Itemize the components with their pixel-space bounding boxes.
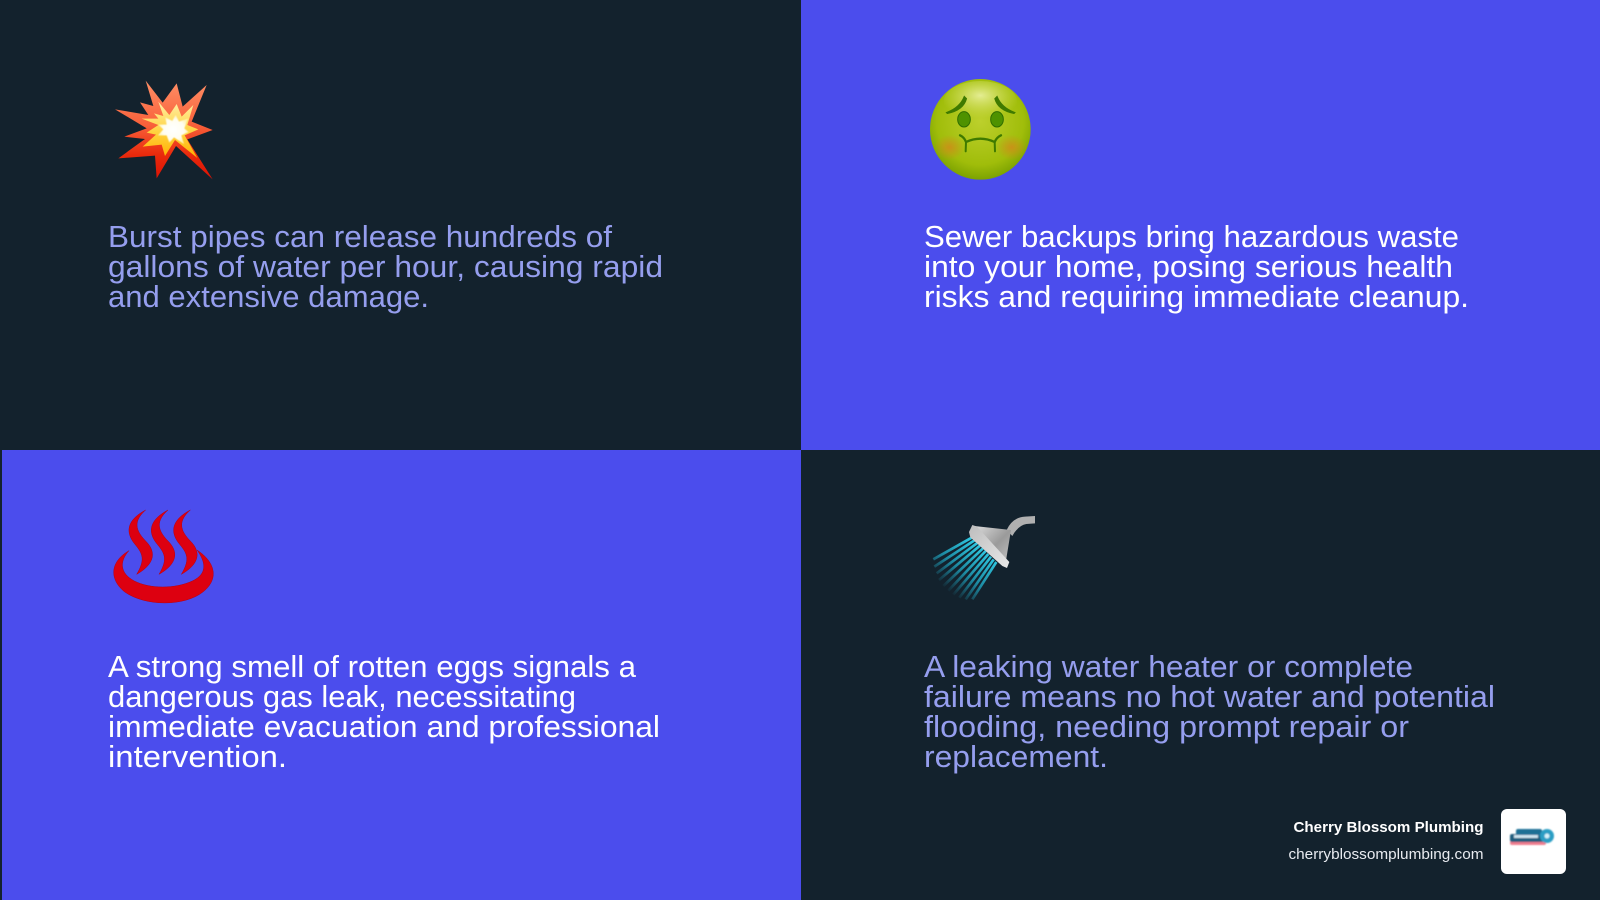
panel: gas leak [2,450,801,900]
logo card [1501,809,1566,874]
water heater description: A leaking water heater or complete [924,649,1413,684]
water heater description: failure means no hot water and potential [924,679,1495,714]
burst pipes description: and extensive damage. [108,279,429,314]
water heater description: replacement. [924,739,1108,774]
gas leak description [108,649,660,774]
sewer backups description: risks and requiring immediate cleanup. [924,279,1469,314]
icon: hot springs [114,510,213,603]
gas leak description: intervention. [108,739,287,774]
panel: water heater [801,450,1600,900]
water heater description [924,649,1495,774]
sewer backups description: Sewer backups bring hazardous waste [924,219,1459,254]
icon: collision burst [115,81,213,179]
sewer backups description [924,219,1469,314]
gas leak description: immediate evacuation and professional [108,709,660,744]
brand website: cherryblossomplumbing.com [1288,846,1484,863]
icon: nauseated face [930,79,1031,180]
brand name: Cherry Blossom Plumbing [1294,819,1484,836]
gas leak description: dangerous gas leak, necessitating [108,679,576,714]
burst pipes description: gallons of water per hour, causing rapid [108,249,663,284]
panel: burst pipes [2,0,801,450]
sewer backups description: into your home, posing serious health [924,249,1453,284]
burst pipes description [108,219,663,314]
logo mark [1510,829,1554,845]
icon: shower head [933,516,1035,599]
panel: sewer backups [801,0,1600,450]
burst pipes description: Burst pipes can release hundreds of [108,219,612,254]
gas leak description: A strong smell of rotten eggs signals a [108,649,637,684]
water heater description: flooding, needing prompt repair or [924,709,1409,744]
